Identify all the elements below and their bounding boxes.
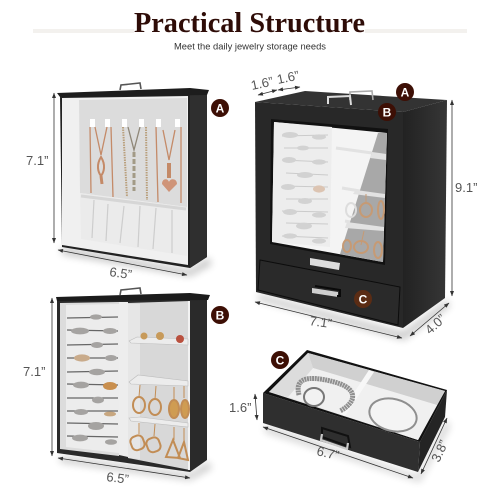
divider — [340, 370, 374, 416]
badge C tray: C — [276, 354, 285, 368]
panel: B ring door — [56, 288, 212, 480]
front face — [263, 393, 420, 472]
dimension: tray height: 1.6” — [229, 400, 251, 415]
top bar — [57, 88, 209, 97]
rings — [71, 314, 117, 445]
dimension: A width — [58, 250, 187, 282]
handle — [120, 83, 141, 90]
drawer — [258, 260, 400, 325]
shadow — [60, 456, 212, 480]
dimension: tray depth: 3.8” — [428, 438, 451, 464]
frame — [60, 92, 207, 268]
title: Practical Structure — [134, 8, 365, 39]
panel: C tray — [263, 350, 450, 482]
top bar — [56, 293, 210, 301]
window earrings — [343, 194, 384, 258]
badge C tray — [271, 351, 289, 369]
interior — [269, 353, 445, 440]
dimension: cabinet width — [255, 302, 402, 338]
badge B left — [211, 306, 229, 324]
rim — [263, 350, 447, 442]
ring panel — [60, 302, 119, 456]
drawer handle — [312, 288, 338, 297]
dimension: top depth: 1.6” — [250, 74, 275, 93]
dimension: B width: 6.5” — [106, 469, 130, 487]
shadow — [258, 294, 450, 340]
title line right — [365, 29, 467, 33]
dimension: tray width — [263, 427, 413, 478]
dimension: top depth: 1.6” — [276, 68, 301, 87]
shadow — [62, 247, 212, 276]
badge A cabinet — [396, 83, 414, 101]
top — [255, 91, 447, 112]
watch — [298, 378, 353, 411]
shelf panel — [128, 301, 190, 470]
badge A cabinet: A — [401, 86, 410, 100]
panel: A necklace door — [57, 83, 212, 276]
back inner walls — [308, 353, 445, 405]
white frame — [62, 96, 188, 265]
tray handle — [322, 428, 350, 447]
stud earrings — [140, 332, 184, 343]
right side — [403, 100, 447, 328]
pouch — [80, 193, 187, 256]
heart pendant — [162, 179, 177, 192]
subtitle: Meet the daily jewelry storage needs — [174, 42, 327, 52]
panel: cabinet — [255, 91, 450, 340]
ring column — [272, 122, 332, 247]
title line left — [33, 29, 134, 33]
shadow — [265, 420, 450, 482]
name plate — [310, 258, 340, 270]
left inner wall — [269, 353, 313, 397]
gray backing — [79, 98, 187, 207]
dimension: cabinet depth — [410, 303, 449, 337]
frame — [57, 296, 207, 472]
divider — [119, 302, 128, 457]
handle — [120, 288, 141, 295]
dimension: B width — [58, 458, 190, 487]
badge B cabinet: B — [383, 106, 392, 120]
dimension: tray depth — [421, 418, 451, 474]
hooks — [90, 119, 180, 127]
window frame — [270, 119, 388, 265]
front — [255, 102, 403, 328]
hoop earrings — [129, 385, 189, 460]
window rings — [282, 135, 372, 238]
dimension: tray height — [229, 394, 257, 420]
dimension: cabinet width: 7.1” — [309, 313, 333, 331]
heading block — [33, 8, 467, 52]
interior floor — [288, 368, 437, 440]
dimension: top depth — [250, 68, 301, 95]
ring slots — [67, 317, 118, 437]
shelves — [129, 337, 188, 427]
badge C drawer: C — [359, 292, 368, 306]
badge A left: A — [216, 102, 225, 116]
handles — [350, 91, 373, 100]
uncovered shelves — [340, 133, 387, 262]
dimension: A height: 7.1” — [26, 153, 48, 168]
dimension: B height: 7.1” — [23, 364, 45, 379]
dimension: cabinet height: 9.1” — [455, 180, 477, 195]
bracelet — [366, 394, 420, 436]
badge C drawer — [354, 290, 372, 308]
necklaces — [90, 127, 181, 203]
dimension: cabinet depth: 4.0” — [422, 311, 449, 337]
right face — [418, 390, 447, 472]
badge B cabinet — [378, 103, 396, 121]
dimension: A width: 6.5” — [109, 264, 133, 282]
badge B left: B — [216, 308, 225, 322]
window — [272, 122, 387, 262]
dimension: tray width: 6.7” — [315, 443, 341, 463]
badge A left — [211, 99, 229, 117]
